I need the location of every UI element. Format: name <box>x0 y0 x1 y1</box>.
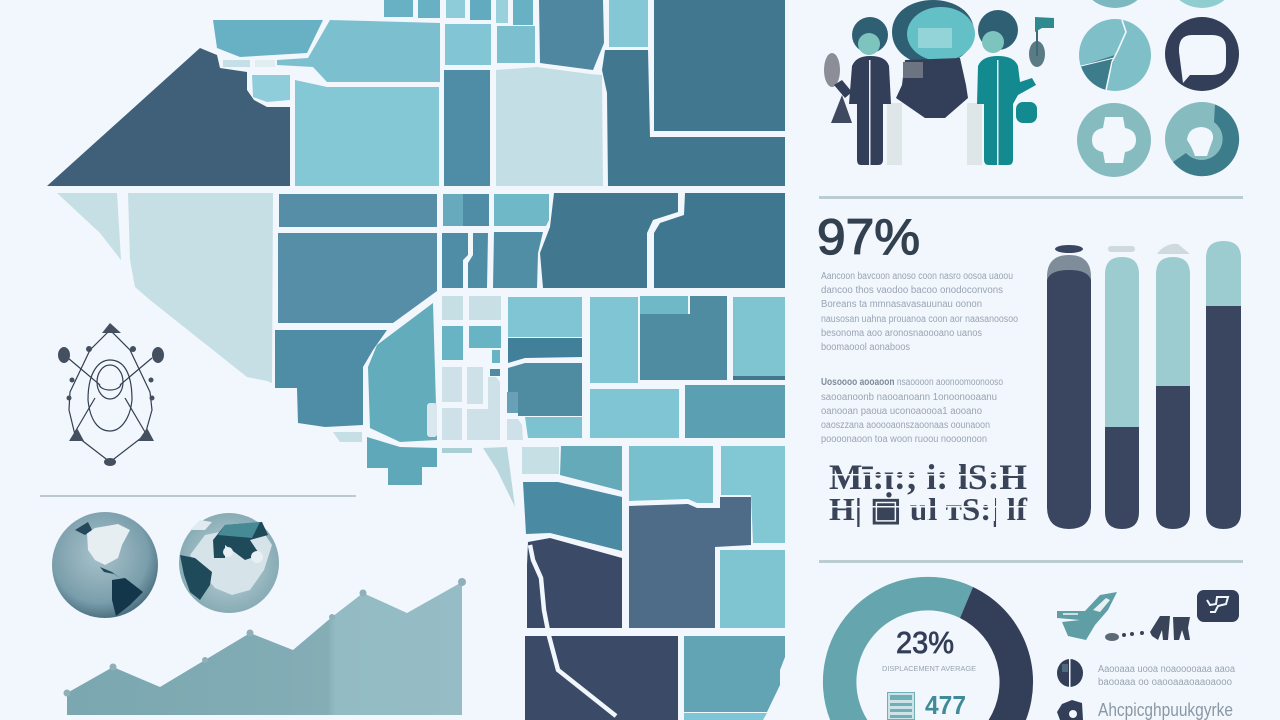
ring cross <box>1077 103 1151 177</box>
region: south dark <box>527 538 622 628</box>
icon: dark car badge <box>1057 700 1083 720</box>
top partial circles <box>1092 0 1225 8</box>
person left <box>824 17 902 165</box>
bar 2 <box>1105 246 1139 529</box>
donut secondary value: 477 <box>925 690 966 720</box>
divider: left <box>40 495 356 497</box>
text block: paragraph two <box>821 377 1003 445</box>
bar 1 <box>1047 245 1091 529</box>
region: north-west dark <box>47 48 290 186</box>
text block: paragraph one: besonoma aoo aronosnaoooano uanos <box>821 328 982 339</box>
text block: garbled glyphs: H| ▣ ul ᴛS:| lf <box>829 491 1027 527</box>
text block: paragraph two: poooonaoon toa woon ruoou noooonoon <box>821 434 987 445</box>
text block: badge caption <box>1098 664 1235 688</box>
text block: paragraph two: oanooan paoua uconoaoooa1 aooano <box>821 406 982 417</box>
area chart <box>64 578 466 715</box>
ring bulb <box>1165 102 1239 176</box>
donut value: 23% <box>896 625 954 660</box>
ring speech bubble <box>1165 17 1239 91</box>
divider: lower right <box>819 560 1243 563</box>
text block: paragraph one: nausosan uahna prouanoa coon aor naasanoosoo <box>821 314 1018 325</box>
text block: large caption: Ahcpicghpuukgyrke <box>1098 700 1233 720</box>
icon: calculator <box>888 692 914 720</box>
divider: upper right <box>819 196 1243 199</box>
heading: 97%: 97% <box>817 209 920 265</box>
text block: garbled glyphs: Mī:ᴉ:; i:dS:H <box>829 457 1027 498</box>
text block: badge caption: baooaaa oo oaooaaaoaaoaooo <box>1098 677 1232 688</box>
bar chart <box>1047 241 1241 529</box>
text block: paragraph one: boomaoool aonaboos <box>821 342 910 353</box>
text block: paragraph one: Aancoon bavcoon anoso coon nasro oosoa uaoou <box>821 271 1013 282</box>
person centre <box>892 0 975 118</box>
icon: small dark tools <box>1105 616 1190 641</box>
pie with wedge <box>1079 19 1151 91</box>
icon: teal plane shape <box>1057 592 1117 640</box>
donut chart <box>823 577 1033 720</box>
text block: paragraph two: oaoszzana aooooaonszaoonaas oounaoon <box>821 420 990 431</box>
bar 4 <box>1206 241 1241 529</box>
icon: globe world <box>179 513 279 613</box>
text block: badge caption: Aaooaaa uooa noaooooaaa aaoa <box>1098 664 1235 675</box>
text block: paragraph one: Boreans ta mmnasavasauunau oonon <box>821 299 982 310</box>
text block: paragraph one: dancoo thos vaodoo bacoo onodoconvons <box>821 285 1003 296</box>
text block: paragraph two: Uosoooo aooaoon nsaoooon aoonoomoonooso <box>821 377 1003 388</box>
bar 3 <box>1156 244 1190 529</box>
icon: three people <box>824 0 1054 165</box>
pie icons <box>1077 0 1239 177</box>
person right <box>967 10 1054 165</box>
icon: globe americas <box>52 512 158 618</box>
icon: network emblem <box>58 323 164 466</box>
choropleth map <box>47 0 785 720</box>
icon: round badge <box>1057 659 1083 687</box>
icon: dark rounded map box <box>1197 590 1239 622</box>
text block: garbled glyphs <box>828 457 1028 527</box>
donut caption: DISPLACEMENT AVERAGE <box>882 666 976 673</box>
text block: paragraph one <box>821 271 1018 353</box>
text block: paragraph two: saooanoonb naooanoann 1onoonooaanu <box>821 392 997 403</box>
